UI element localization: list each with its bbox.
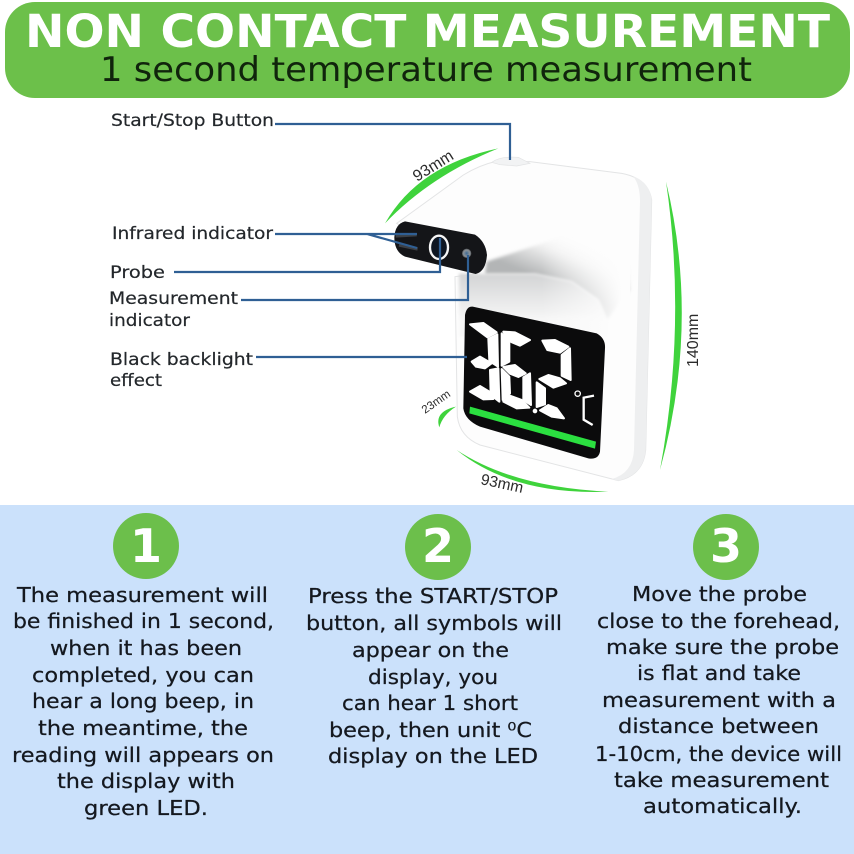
infrared emitters [396,235,418,249]
step 3 text: close to the forehead, [597,609,840,633]
callout labels: Probe [110,263,165,283]
subtitle: 1 second temperature measurement [100,50,752,90]
step 3 text [595,582,842,818]
dimension label 23mm: 23mm [420,388,453,416]
step 1 text: the display with [57,769,235,793]
step 1 [12,513,274,820]
callout labels [109,111,274,391]
step 2 text: beep, then unit ⁰C [329,718,532,742]
dimension label 140mm: 140mm [685,314,702,367]
callout labels: effect [110,371,162,391]
step 3 text: is flat and take [637,661,801,685]
step 1: 1 [130,519,162,573]
celsius unit [575,391,594,425]
step 2 text: display on the LED [328,744,538,768]
shade fade to the right [542,213,630,340]
lower hood shade [459,273,608,337]
green bottom arc [457,450,608,492]
device illustration [385,148,682,492]
panel: steps [0,505,854,854]
probe ring [430,236,448,259]
green top arc [385,148,498,223]
device shell and arcs [385,148,682,492]
step 2 text: Press the START/STOP [308,584,558,608]
step 2 text [306,584,562,768]
callout labels: Black backlight [110,350,253,370]
step 1 text: when it has been [50,636,242,660]
measurement indicator lens [462,249,471,258]
green depth arc [438,407,456,427]
decimal point [533,409,537,413]
green right arc [660,182,682,470]
sensor panel [394,221,487,274]
callout labels: Measurement [109,289,238,309]
start stop button [492,157,530,166]
step 2 [306,514,562,768]
digit 2 [537,340,571,418]
step 1 text: be finished in 1 second, [13,609,274,633]
side strip [612,177,652,481]
callout lines [174,124,510,357]
dimension label top 93mm: 93mm [410,147,457,185]
digit 6 [502,332,531,408]
device body [397,162,652,481]
callout labels: indicator [109,311,190,331]
step 3 text: make sure the probe [606,635,839,659]
step 3 text: take measurement [614,768,829,792]
step 3 text: 1-10cm, the device will [595,742,842,766]
step 3: 3 [710,519,742,573]
green LED bar [469,407,596,449]
step 3 text: Move the probe [632,582,807,606]
digit 3 [470,323,499,402]
step 3 [595,514,842,818]
step 3 text: measurement with a [602,688,836,712]
dimension label bottom 93mm: 93mm [479,471,525,497]
step 2 text: button, all symbols will [306,611,562,635]
step 2: 2 [422,519,454,573]
header banner [5,2,850,98]
step 1 text: completed, you can [32,663,254,687]
arm and hood shading [394,157,630,340]
step 1 text: green LED. [84,796,208,820]
callout labels: Start/Stop Button [111,111,274,131]
step 1 text: The measurement will [16,583,268,607]
callout labels: Infrared indicator [112,224,273,244]
upper wedge shade [485,215,630,320]
step 3 text: distance between [618,714,819,738]
display screen [463,307,605,459]
step 1 text: hear a long beep, in [32,689,254,713]
step 1 text [12,583,274,820]
title: NON CONTACT MEASUREMENT [25,5,830,58]
step 2 text: can hear 1 short [342,691,518,715]
step 2 text: display, you [368,665,498,689]
step 3 text: automatically. [643,794,802,818]
step 1 text: the meantime, the [38,716,248,740]
step 2 text: appear on the [352,638,509,662]
step 1 text: reading will appears on [12,743,274,767]
